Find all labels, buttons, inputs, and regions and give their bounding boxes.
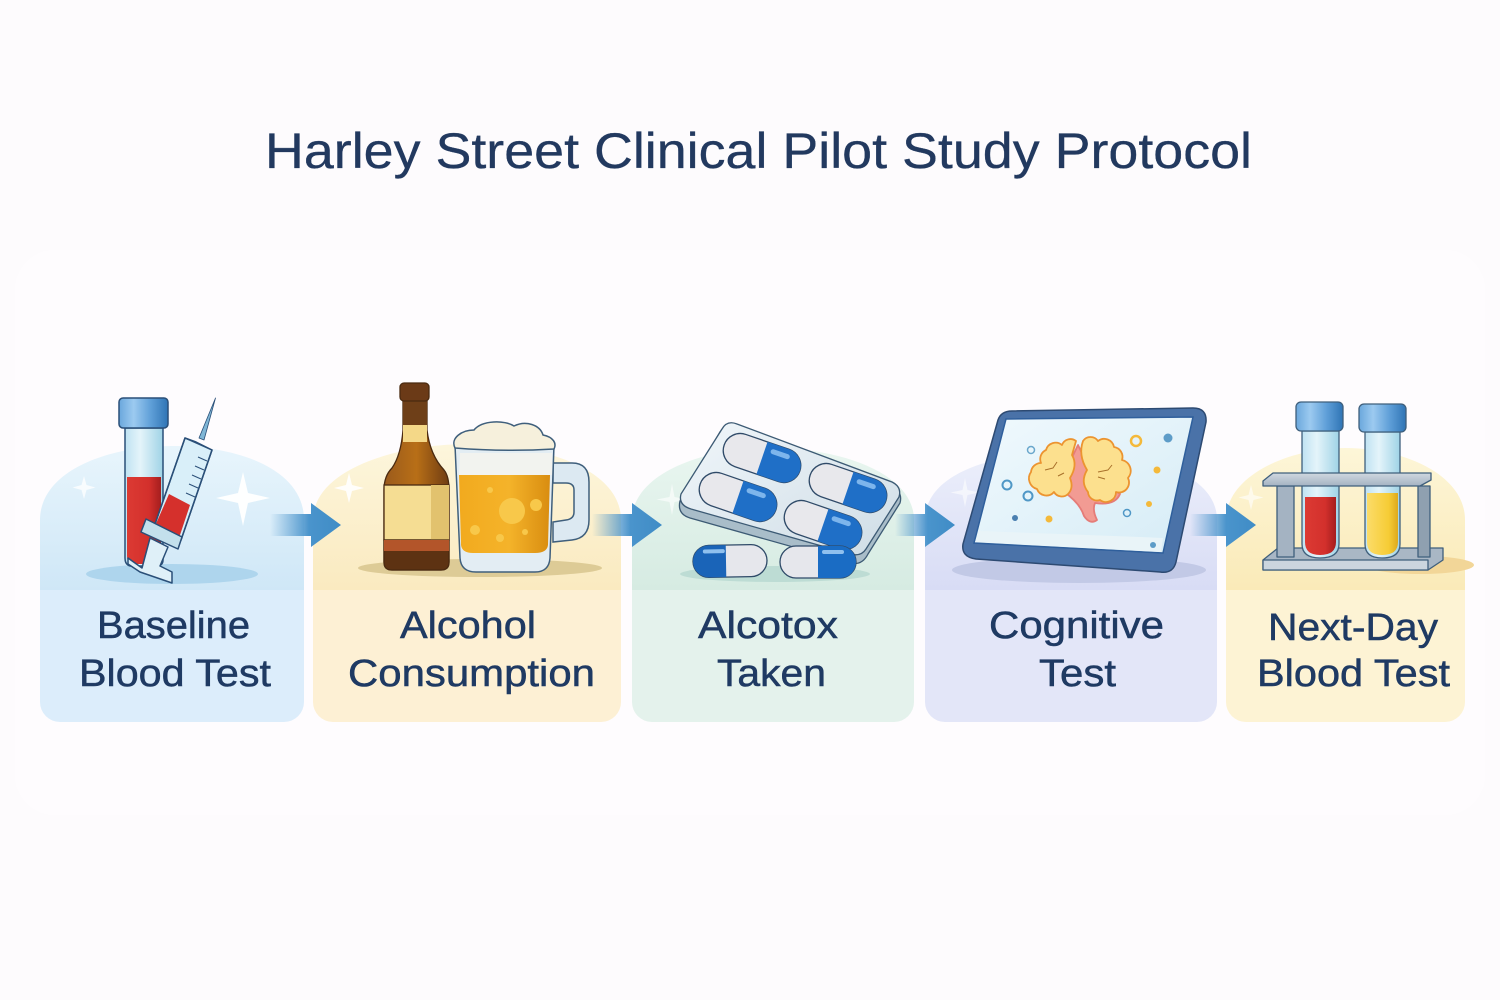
panel: cognitive test — [925, 408, 1217, 722]
pill — [695, 468, 781, 526]
label: Alcohol — [400, 605, 536, 647]
label — [1257, 607, 1450, 695]
icon: tablet — [963, 408, 1206, 572]
panel: alcohol consumption — [313, 383, 621, 722]
label — [79, 605, 271, 695]
icon: brain — [1029, 437, 1131, 522]
panel: baseline blood test — [40, 398, 304, 722]
pill — [805, 459, 891, 517]
label — [698, 605, 838, 695]
label: Next-Day — [1268, 607, 1438, 649]
pill — [719, 429, 805, 487]
arrow: step 1 to step 2 — [270, 503, 341, 547]
title: Harley Street Clinical Pilot Study Protocol — [265, 123, 1252, 179]
label: Blood Test — [79, 653, 271, 695]
label: Consumption — [348, 653, 595, 695]
label: Taken — [717, 653, 826, 695]
label: Test — [1039, 653, 1116, 695]
icon: syringe — [128, 398, 216, 583]
icon: blister pack — [679, 423, 901, 564]
label: Blood Test — [1257, 653, 1450, 695]
icon: loose capsule right — [780, 546, 856, 578]
pill — [780, 496, 866, 554]
panel: alcotox taken — [632, 423, 914, 722]
label: Cognitive — [989, 605, 1164, 647]
icon: blood tube — [119, 398, 168, 566]
arrow: step 4 to step 5 — [1190, 503, 1256, 547]
icon: loose capsule left — [693, 544, 767, 578]
icon: test tube rack — [1263, 402, 1443, 570]
label — [348, 605, 595, 695]
panel: next-day blood test — [1226, 402, 1474, 722]
label: Alcotox — [698, 605, 838, 647]
icon: beer bottle — [384, 383, 449, 570]
label — [989, 605, 1164, 695]
tube: urine — [1359, 404, 1406, 558]
label: Baseline — [97, 605, 250, 647]
icon: beer mug — [454, 422, 589, 572]
arrow: step 3 to step 4 — [895, 503, 955, 547]
tube: blood — [1296, 402, 1343, 558]
arrow: step 2 to step 3 — [592, 503, 662, 547]
